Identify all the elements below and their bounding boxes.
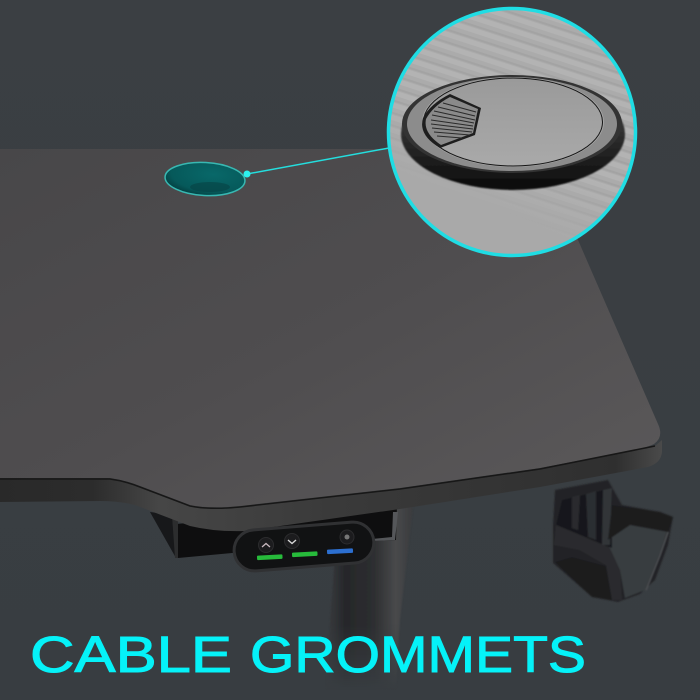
under-desk bracket bbox=[150, 505, 398, 558]
cup holder bbox=[553, 480, 673, 602]
magnified lens bbox=[388, 8, 636, 256]
connector line bbox=[244, 148, 389, 178]
grommet plate bbox=[424, 78, 602, 166]
lens ring bbox=[388, 8, 636, 256]
desk grommet highlight bbox=[164, 160, 246, 198]
icon: up button bbox=[258, 538, 274, 552]
table leg bbox=[331, 508, 406, 668]
icon: cable flap bbox=[422, 94, 481, 148]
control panel bbox=[233, 521, 375, 572]
icon: down button bbox=[284, 534, 300, 548]
title bbox=[30, 626, 586, 683]
green light one bbox=[257, 554, 283, 560]
icon: memory button bbox=[340, 530, 354, 544]
green light two bbox=[292, 551, 318, 557]
desk front dark line bbox=[0, 446, 655, 508]
desk front edge bbox=[0, 440, 662, 531]
blue light bbox=[327, 548, 353, 554]
grommet outer ring bbox=[401, 75, 625, 190]
desk top surface bbox=[0, 149, 660, 507]
title: GROMMETS bbox=[250, 626, 586, 683]
title: CABLE bbox=[30, 626, 232, 683]
